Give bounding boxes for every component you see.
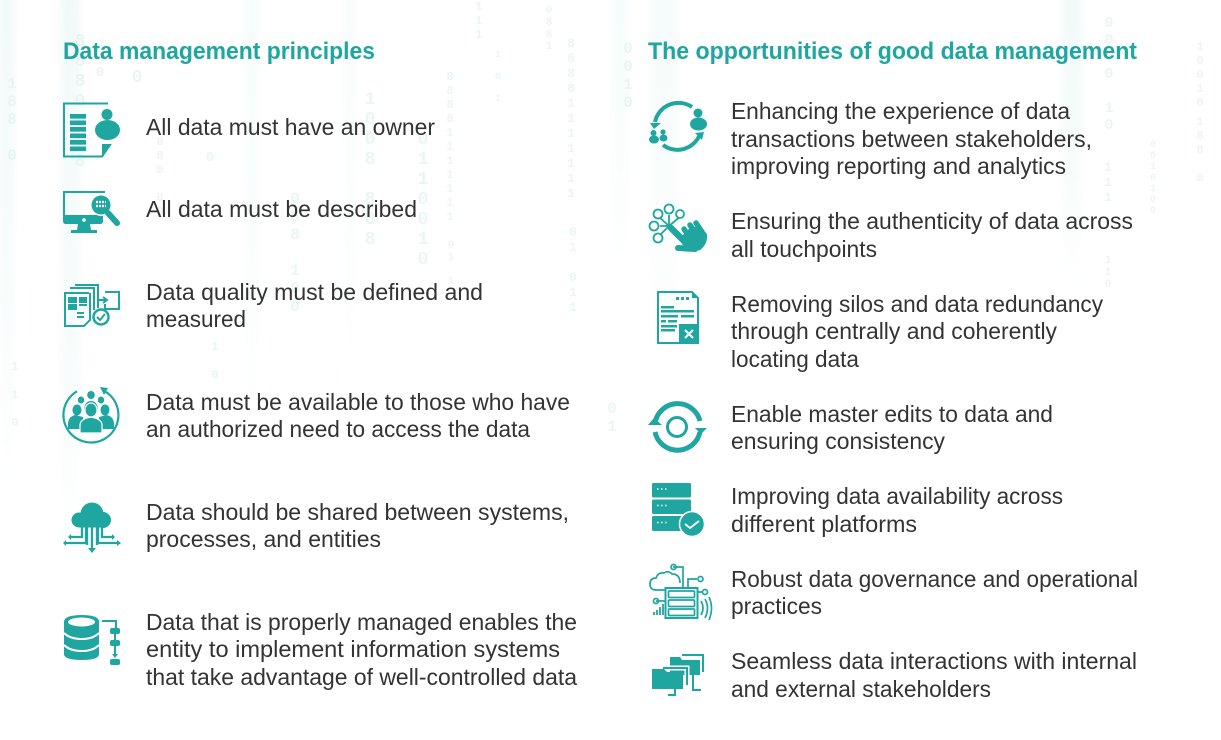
opportunity 5: availability: different platforms xyxy=(731,511,917,537)
principle 6: information systems: entity to implement information systems xyxy=(146,636,560,662)
opportunity 1: experience xyxy=(649,98,1092,179)
principle 1: owner xyxy=(64,104,435,157)
background: faint binary data columns: 188 0 xyxy=(1193,115,1207,185)
principle 3: quality xyxy=(65,279,483,332)
background: faint binary data columns: 111 xyxy=(472,0,486,42)
background: faint binary data columns: 188 0 xyxy=(3,75,21,165)
background: faint binary data columns: 1 1 0 xyxy=(8,360,22,430)
text: Enable master edits to data and xyxy=(731,401,1053,427)
icon: cloud server network xyxy=(650,564,712,620)
opportunity 1: experience: improving reporting and analytics xyxy=(731,153,1066,179)
opportunity 6: governance xyxy=(650,564,1138,620)
background: faint binary data columns: 0010100 xyxy=(1148,140,1158,217)
text: Data should be shared between systems, xyxy=(146,499,569,525)
background: faint binary data columns: 111 xyxy=(1100,160,1116,205)
heading: data management principles: Data management principles xyxy=(63,38,375,65)
background: faint binary data columns: 00 0 10 xyxy=(1100,15,1118,134)
text: Removing silos and data redundancy xyxy=(731,291,1103,317)
background: faint binary data columns: 0010 xyxy=(619,40,637,112)
principle 5: sharing xyxy=(63,499,569,553)
background: faint binary data columns: 01 1 xyxy=(445,240,457,288)
background: faint binary data columns: 0881 xyxy=(543,5,555,53)
principle 4: access xyxy=(63,387,570,443)
text: Ensuring the authenticity of data across xyxy=(731,208,1133,234)
opportunity 2: authenticity: all touchpoints xyxy=(731,236,877,262)
text: Seamless data interactions with internal xyxy=(731,648,1137,674)
background: faint binary data columns: 01 011 xyxy=(566,225,580,315)
background: faint binary data columns: 0 xyxy=(92,65,108,81)
icon: monitor with magnifier xyxy=(63,192,117,233)
opportunity 6: governance: practices xyxy=(731,593,822,619)
background: faint binary data columns: 0110010 xyxy=(413,130,433,270)
icon: cloud with arrows xyxy=(63,502,121,553)
text: Data quality must be defined and xyxy=(146,279,483,305)
icon: sync ring xyxy=(648,404,707,450)
principle 6: information systems xyxy=(64,609,578,690)
background: faint binary data columns: 88881111111 xyxy=(564,36,578,201)
principle 6: information systems: that take advantage of well-controlled data xyxy=(146,664,578,690)
icon: group inside circular arrow xyxy=(63,387,118,443)
opportunity 1: experience: transactions between stakeholders, xyxy=(731,126,1092,152)
background: faint binary data columns: 01 xyxy=(603,400,621,436)
heading: opportunities of good data management: The opportunities of good data management xyxy=(648,38,1137,65)
text: Data must be available to those who have xyxy=(146,389,570,415)
background: faint binary data columns: 0 xyxy=(202,150,218,166)
opportunity 7: interactions: and external stakeholders xyxy=(731,676,991,702)
opportunity 2: authenticity xyxy=(650,204,1133,262)
background: faint binary data columns: 1 0 0 xyxy=(208,340,222,410)
background: faint binary data columns: 10010 xyxy=(1193,40,1207,110)
icon: stakeholder exchange cycle xyxy=(649,103,707,150)
icon: document and owner xyxy=(64,104,120,157)
icon: document with delete box xyxy=(658,292,699,344)
background: faint binary data columns: 1 0 1 xyxy=(492,50,504,105)
icon: database with flow xyxy=(64,615,120,665)
background: faint binary data columns: 0 xyxy=(127,68,147,88)
opportunity 3: silos: through centrally and coherently xyxy=(731,318,1057,344)
opportunity 3: silos: locating data xyxy=(731,346,860,372)
icon: server with check xyxy=(652,483,704,536)
opportunity 4: master edits xyxy=(648,401,1053,454)
icon: linked folders xyxy=(652,655,703,695)
text: All data must be described xyxy=(146,196,417,222)
opportunity 4: master edits: ensuring consistency xyxy=(731,428,945,454)
text: Robust data governance and operational xyxy=(731,566,1138,592)
opportunity 7: interactions xyxy=(652,648,1137,702)
icon: hand touching nodes xyxy=(650,204,707,251)
principle 3: quality: measured xyxy=(146,306,246,332)
text: Data that is properly managed enables the xyxy=(146,609,577,635)
background: faint binary data columns: 880 00 xyxy=(153,135,167,219)
principle 2: described xyxy=(63,192,417,233)
background: faint binary data columns: 88881111111 xyxy=(443,70,457,224)
opportunity 3: silos xyxy=(658,291,1103,372)
text: All data must have an owner xyxy=(146,114,435,140)
text: Enhancing the experience of data xyxy=(731,98,1071,124)
background: faint binary data columns: 1008 808 xyxy=(360,90,380,250)
icon: documents with check xyxy=(65,285,119,326)
background: faint binary data columns: 8880088 xyxy=(70,32,90,172)
principle 5: sharing: processes, and entities xyxy=(146,526,381,552)
principle 4: access: an authorized need to access the data xyxy=(146,416,531,442)
background: faint binary data columns: 088 100 xyxy=(286,190,304,316)
opportunity 5: availability xyxy=(652,483,1063,537)
background: faint binary data columns: 110 xyxy=(1102,255,1114,291)
text: Improving data availability across xyxy=(731,483,1063,509)
